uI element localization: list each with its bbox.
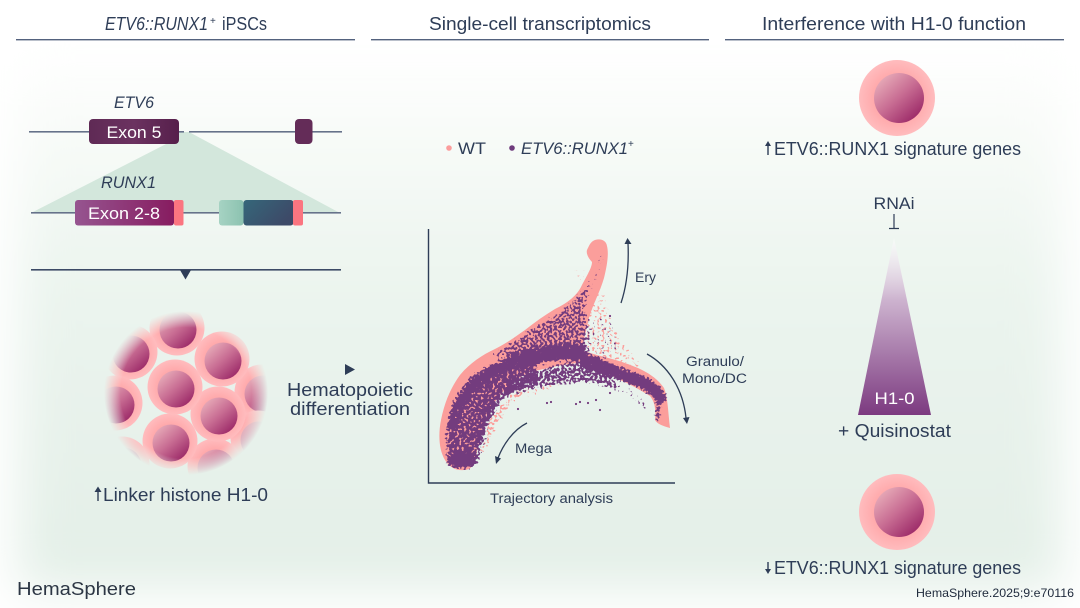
WT cell cloud xyxy=(439,239,670,470)
heading: ETV6::RUNX1 iPSCs: + xyxy=(210,16,216,27)
RUNX1 gene line xyxy=(31,212,341,214)
under-hub cloud xyxy=(505,361,628,398)
arrow: Granulo/Mono/DC xyxy=(647,354,690,424)
label: Hematopoietic differentiation: differentiation xyxy=(290,399,410,419)
label: RUNX1: RUNX1 xyxy=(101,174,156,192)
chart: trajectory scatter xyxy=(428,229,747,506)
heading: ETV6::RUNX1 iPSCs: ETV6::RUNX1 xyxy=(105,14,208,34)
upper body xyxy=(486,282,588,358)
chart: H1-0 gradient triangle: H1-0 xyxy=(874,390,914,408)
label: ETV6: ETV6 xyxy=(114,94,155,112)
exon: Exon 5: Exon 5 xyxy=(106,123,162,142)
label: Hematopoietic differentiation xyxy=(287,380,413,419)
WT scattered cells xyxy=(478,262,650,455)
axis label: Trajectory analysis xyxy=(490,491,613,506)
label: Hematopoietic differentiation: Hematopoietic xyxy=(287,380,413,400)
label: RNAi inhibition: RNAi xyxy=(874,194,914,213)
chart: H1-0 gradient triangle xyxy=(858,238,931,415)
product line with arrowhead xyxy=(31,269,341,280)
legend: ETV6::RUNX1 xyxy=(521,139,628,158)
hub xyxy=(525,352,586,360)
legend xyxy=(446,139,634,158)
coral exon right xyxy=(293,200,303,226)
coral exon xyxy=(174,200,184,226)
label: down signature genes: ETV6::RUNX1 signature genes xyxy=(774,558,1021,578)
label: Mega: Mega xyxy=(515,441,553,456)
heading: ETV6::RUNX1 iPSCs xyxy=(16,14,355,40)
outer dense stripe xyxy=(451,378,482,428)
exon: Exon 5 xyxy=(89,119,179,144)
label: Granulo/Mono/DC xyxy=(682,354,747,386)
icon: upper cell xyxy=(859,60,935,136)
ETV6::RUNX1 scattered cells xyxy=(445,252,663,469)
mint exon xyxy=(219,200,244,226)
gap scatter xyxy=(586,312,622,358)
mid arm stripe xyxy=(472,358,532,384)
stem xyxy=(586,252,602,296)
right branch xyxy=(582,358,663,402)
arrow: Ery xyxy=(621,238,632,303)
heading: ETV6::RUNX1 iPSCs: iPSCs xyxy=(222,14,267,34)
inner arm fringe xyxy=(482,400,495,446)
branch tail xyxy=(657,400,660,421)
panel: gene fusion diagram xyxy=(29,94,342,280)
exon: Exon 2-8 xyxy=(75,200,174,226)
label: Granulo/Mono/DC: Mono/DC xyxy=(682,371,747,386)
heading: Single-cell transcriptomics: Single-cell transcriptomics xyxy=(429,14,651,34)
label: Quisinostat: + Quisinostat xyxy=(838,421,951,441)
exon: Exon 2-8: Exon 2-8 xyxy=(88,204,160,223)
branch fringe xyxy=(628,390,650,414)
label: up signature genes: ETV6::RUNX1 signature genes xyxy=(774,139,1021,159)
legend: + xyxy=(628,139,634,150)
illustration: iPSC colony xyxy=(106,312,267,472)
label: Ery: Ery xyxy=(635,270,656,285)
arrow: to differentiation xyxy=(345,364,355,375)
arrow: Mega xyxy=(495,423,527,464)
label: Granulo/Mono/DC: Granulo/ xyxy=(686,354,744,369)
heading: Interference with H1-0 function: Interference with H1-0 function xyxy=(762,14,1026,34)
label: Linker histone H1-0: Linker histone H1-0 xyxy=(103,485,268,505)
translocation wedge xyxy=(31,132,340,213)
outlier dots xyxy=(517,315,611,411)
lower arm dense tip xyxy=(446,453,476,469)
citation: HemaSphere.2025;9:e70116 xyxy=(916,586,1074,600)
ETV6 gene line xyxy=(29,131,342,133)
label: RNAi inhibition xyxy=(874,194,914,228)
small ETV6 exon xyxy=(295,119,312,144)
legend: WT xyxy=(458,139,486,158)
logo: HemaSphere: HemaSphere xyxy=(17,578,136,599)
icon: lower cell xyxy=(859,474,935,550)
teal exon xyxy=(244,200,294,226)
axes xyxy=(428,229,675,483)
lower arm density xyxy=(445,348,537,469)
